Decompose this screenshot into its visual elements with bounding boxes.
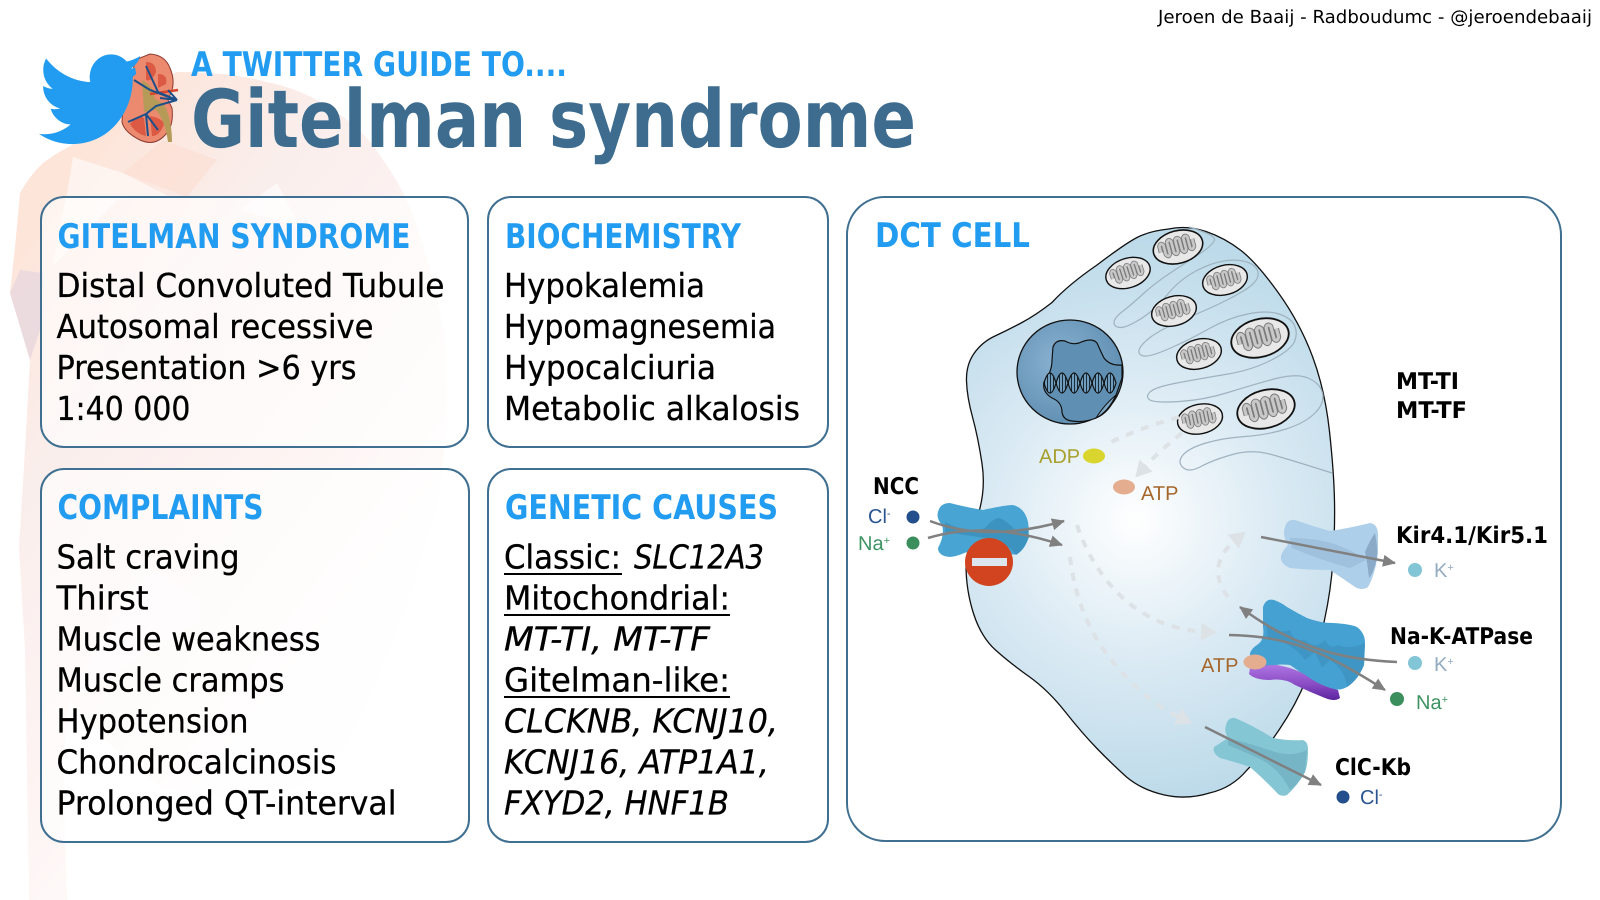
ion: Cl- NCC: Cl — [868, 506, 887, 528]
arrow: Cl in — [930, 521, 1064, 532]
text block: Presentation >6 yrs — [56, 348, 356, 387]
ion: K+ Kir: K — [1434, 560, 1447, 582]
text block: Hypotension — [56, 702, 248, 740]
ion: Na+ pump: Na — [1416, 692, 1442, 714]
ion: Cl- bottom: - — [1379, 789, 1383, 801]
channel: NCC — [928, 503, 1064, 586]
dashed arrow: NCC to Na-K-ATPase — [1077, 525, 1207, 632]
text block: FXYD2, HNF1B — [504, 784, 729, 822]
arrow: K in — [1240, 607, 1397, 662]
text block: Prolonged QT-interval — [56, 784, 396, 822]
icon: inhibitor stop sign — [965, 538, 1013, 586]
ion: K+ Kir: + — [1447, 562, 1454, 574]
text block: Classic: — [504, 538, 621, 576]
panel: DCT cell — [847, 197, 1561, 841]
dashed arrow: recycling to Kir — [1218, 538, 1238, 597]
text block: Hypokalemia — [504, 266, 705, 305]
text block: Gitelman-like: — [504, 660, 730, 700]
ion: Na+ pump — [1390, 692, 1448, 714]
label: MT genes: MT-TF — [1396, 398, 1467, 424]
label: ADP — [1039, 446, 1105, 468]
ion: Cl- NCC — [868, 506, 920, 528]
text block: KCNJ16, ATP1A1, — [504, 742, 769, 782]
text block: Chondrocalcinosis — [56, 742, 336, 782]
ion: K+ pump — [1408, 654, 1454, 676]
label: ATP: ATP — [1141, 483, 1178, 505]
ion: Cl- bottom: Cl — [1360, 787, 1379, 809]
purple beta subunit — [1249, 665, 1340, 700]
label: ClC-Kb: ClC-Kb — [1335, 755, 1411, 781]
ion: Na+ NCC: Na — [858, 533, 884, 555]
ion: Cl- bottom — [1336, 787, 1383, 809]
text block: Distal Convoluted Tubule — [56, 266, 444, 305]
heading: BIOCHEMISTRY — [505, 217, 741, 257]
ion: Cl- NCC: - — [887, 508, 891, 520]
panel: Biochemistry — [488, 197, 828, 447]
dashed arrow: ADP to ATP — [1142, 433, 1182, 470]
text block: CLCKNB, KCNJ10, — [504, 702, 778, 740]
label: MT genes — [1396, 369, 1467, 424]
nucleus — [1017, 320, 1123, 424]
text block: Thirst — [56, 578, 149, 618]
heading: COMPLAINTS — [58, 488, 264, 528]
cell body — [966, 227, 1335, 797]
ATP on pump — [1244, 654, 1266, 670]
label: ATP — [1113, 480, 1178, 505]
channel: Kir4.1/Kir5.1 — [1261, 520, 1395, 589]
text block — [56, 266, 444, 428]
text block: Hypocalciuria — [504, 348, 716, 387]
text block: Autosomal recessive — [56, 307, 374, 346]
text block — [504, 538, 778, 822]
text block: Salt craving — [56, 538, 240, 576]
arrow: K out — [1261, 537, 1395, 563]
ion: K+ pump: K — [1434, 654, 1447, 676]
panel: Gitelman syndrome — [41, 197, 468, 447]
text block: Muscle weakness — [56, 620, 320, 658]
label: Na-K-ATPase: Na-K-ATPase — [1390, 624, 1533, 650]
ion: Na+ pump: + — [1442, 694, 1448, 706]
heading: DCT CELL — [875, 216, 1030, 256]
panel: Genetic causes — [488, 469, 828, 842]
label: NCC: NCC — [873, 474, 919, 500]
dashed arrow: NCC to ClC-Kb — [1070, 557, 1183, 719]
heading: GITELMAN SYNDROME — [58, 217, 410, 257]
label: ATP at pump: ATP — [1201, 655, 1238, 677]
arrow: Na out — [1229, 635, 1385, 690]
credit line: Jeroen de Baaij - Radboudumc - @jeroendebaaij — [1157, 7, 1592, 28]
subtitle: A TWITTER GUIDE TO.... — [191, 45, 567, 85]
mitochondria — [1102, 225, 1299, 438]
text block: Hypomagnesemia — [504, 307, 776, 346]
ion: K+ Kir — [1408, 560, 1454, 582]
text block — [56, 538, 397, 822]
text block: SLC12A3 — [634, 538, 764, 576]
endoplasmic reticulum — [1114, 227, 1332, 473]
label: Kir: Kir4.1/Kir5.1 — [1396, 523, 1548, 549]
icon: twitter bird — [39, 54, 143, 144]
ion: Na+ NCC — [858, 533, 920, 555]
channel: ClC-Kb — [1205, 718, 1321, 796]
text block: Mitochondrial: — [504, 578, 730, 618]
label: ADP: ADP — [1039, 446, 1080, 468]
arrow: Na in — [928, 530, 1062, 545]
background: faint low-poly kidney — [10, 72, 447, 900]
ion: K+ pump: + — [1447, 656, 1454, 668]
heading: GENETIC CAUSES — [505, 488, 778, 528]
dashed arrow: ATP use to ADP — [1109, 417, 1179, 443]
text block — [504, 266, 800, 428]
text block: MT-TI, MT-TF — [504, 620, 711, 658]
icon: kidney behind bird — [122, 54, 178, 142]
text block: Metabolic alkalosis — [504, 389, 800, 428]
panel: Complaints — [41, 469, 469, 842]
arrow: Cl out — [1205, 727, 1321, 785]
label: MT genes: MT-TI — [1396, 369, 1459, 395]
title: Gitelman syndrome — [191, 73, 916, 166]
text block: Muscle cramps — [56, 660, 284, 700]
ion: Na+ NCC: + — [884, 535, 890, 547]
text block: 1:40 000 — [56, 389, 190, 428]
channel: Na-K-ATPase — [1229, 600, 1397, 700]
DNA helix — [1044, 373, 1116, 393]
